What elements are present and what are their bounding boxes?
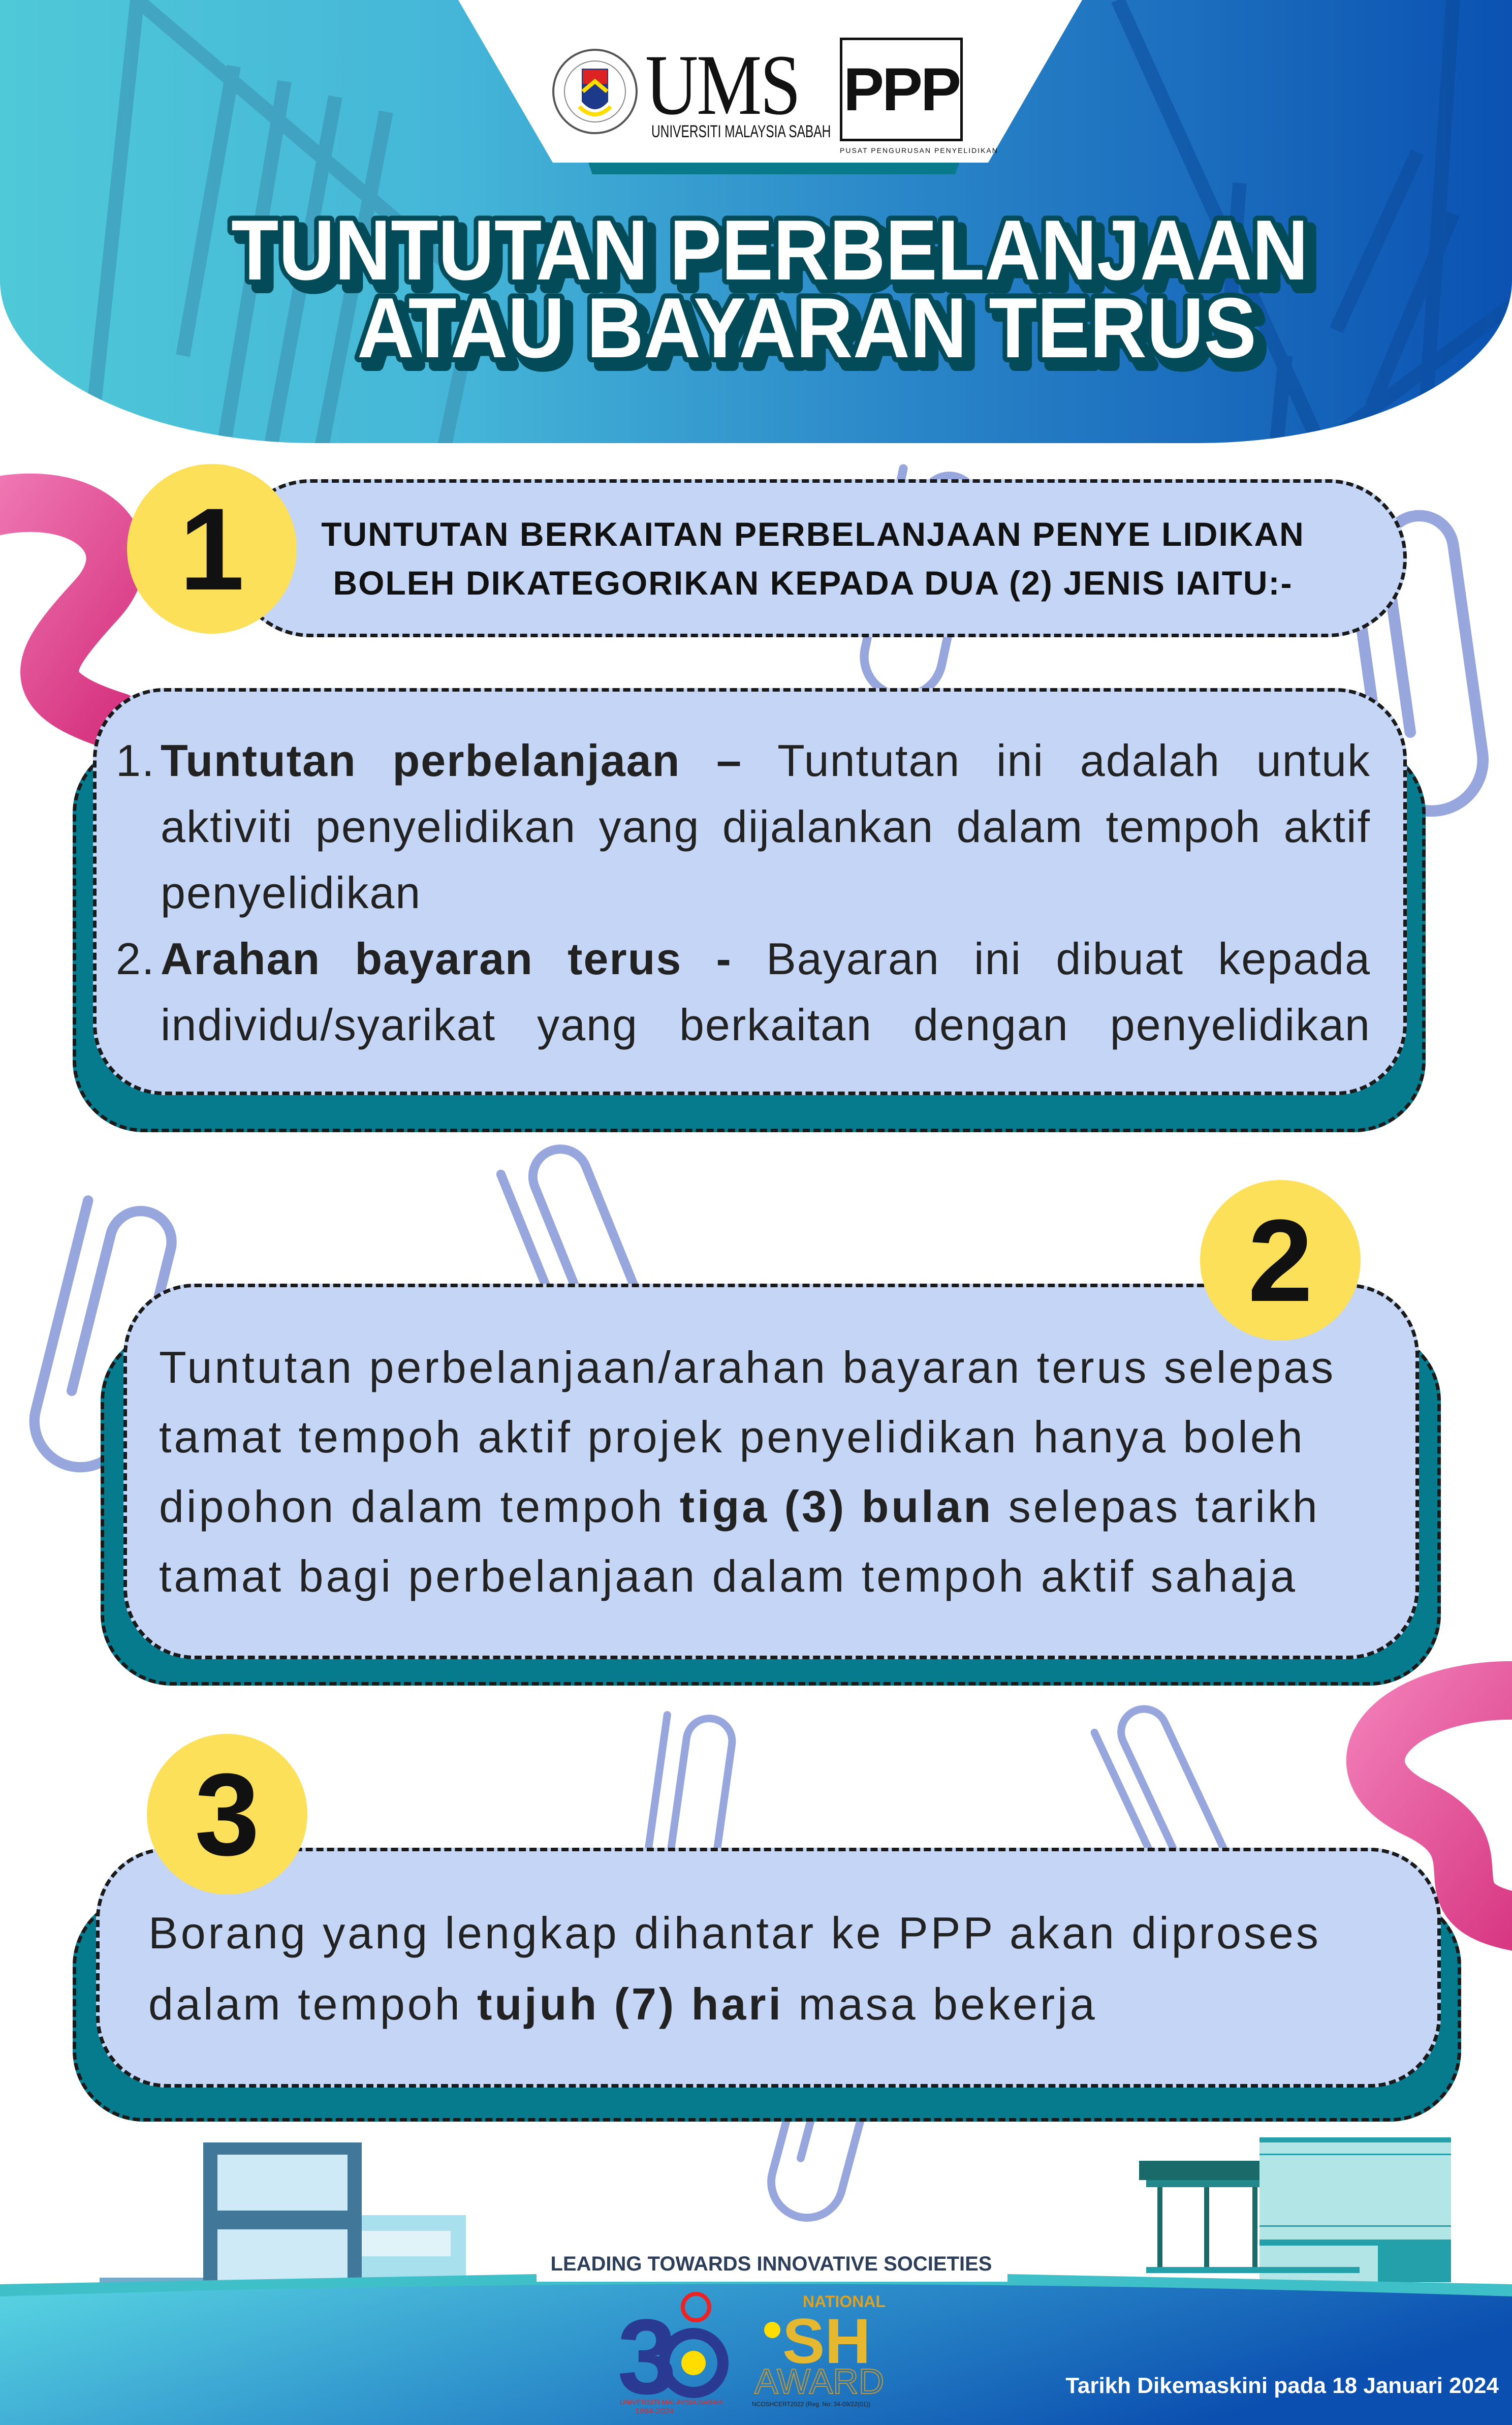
panel 2 text: dipohon dalam tempoh tiga (3) bulan selepas tarikh	[159, 1481, 1320, 1532]
title: ATAU BAYARAN TERUS	[357, 280, 1256, 376]
footer logos: UNIVERSITI MALAYSIA SABAH	[620, 2398, 722, 2406]
panel 3	[73, 1734, 1461, 2122]
panel 1 body: aktiviti penyelidikan yang dijalankan dalam tempoh aktif	[161, 801, 1371, 852]
title: TUNTUTAN PERBELANJAAN	[231, 203, 1308, 298]
panel 2 text: tamat tempoh aktif projek penyelidikan hanya boleh	[159, 1412, 1305, 1462]
panel 2 text	[159, 1342, 1336, 1601]
number 2 badge: 2	[1248, 1195, 1313, 1325]
panel 1 header text: TUNTUTAN BERKAITAN PERBELANJAAN PENYE LIDIKAN	[321, 515, 1305, 553]
panel 1 body: 2.	[116, 934, 155, 984]
footer tagline: LEADING TOWARDS INNOVATIVE SOCIETIES	[551, 2253, 992, 2275]
panel 1 body: Tuntutan perbelanjaan – Tuntutan ini adalah untuk	[161, 735, 1371, 786]
logo tab	[458, 0, 1082, 174]
footer logos: SH	[782, 2306, 871, 2377]
logo: PPP	[840, 38, 998, 154]
panel 1 body: 1.	[116, 735, 155, 786]
panel 1 list text	[116, 735, 1371, 1050]
panel 2	[101, 1180, 1441, 1686]
title	[228, 203, 1316, 383]
panel 1 header text: BOLEH DIKATEGORIKAN KEPADA DUA (2) JENIS IAITU:-	[333, 564, 1293, 602]
panel 1 body: Arahan bayaran terus - Bayaran ini dibuat kepada	[161, 934, 1371, 984]
footer logos: NATIONAL	[803, 2292, 886, 2311]
footer logos	[617, 2292, 886, 2414]
number 1 badge: 1	[179, 484, 244, 614]
footer logos: NCOSHCERT2022 (Reg. No: 34-09/22(01))	[752, 2401, 870, 2408]
footer logos: 3	[617, 2297, 677, 2414]
panel 1 body: individu/syarikat yang berkaitan dengan penyelidikan	[161, 1000, 1371, 1050]
panel 3 text	[148, 1908, 1321, 2029]
number 3 badge	[147, 1734, 307, 1894]
panel 1 header text	[321, 515, 1305, 602]
title: TUNTUTAN PERBELANJAAN	[239, 210, 1316, 305]
logo: UMS: UMS	[645, 37, 799, 133]
panel 1 body: penyelidikan	[161, 867, 421, 918]
logo: UMS: UNIVERSITI MALAYSIA SABAH	[651, 122, 831, 141]
panel 1 header pill	[232, 479, 1407, 637]
title: ATAU BAYARAN TERUS	[365, 288, 1264, 383]
panel 1 header	[127, 464, 1407, 637]
panel 3 text: dalam tempoh tujuh (7) hari masa bekerja	[148, 1979, 1097, 2029]
panel 1 body	[73, 688, 1426, 1132]
panel 2 text: tamat bagi perbelanjaan dalam tempoh aktif sahaja	[159, 1551, 1298, 1601]
footer date: Tarikh Dikemaskini pada 18 Januari 2024	[1065, 2373, 1499, 2398]
title: ATAU BAYARAN TERUS	[357, 280, 1256, 376]
footer buildings	[0, 2137, 1512, 2425]
number 3 badge: 3	[195, 1749, 260, 1879]
logo: PPP: PPP	[843, 55, 959, 123]
logo: PPP: PUSAT PENGURUSAN PENYELIDIKAN	[840, 146, 998, 154]
panel 2 text: Tuntutan perbelanjaan/arahan bayaran terus selepas	[159, 1342, 1336, 1392]
logo: UMS	[552, 37, 831, 141]
footer logos: AWARD	[754, 2361, 884, 2401]
panel 3 text: Borang yang lengkap dihantar ke PPP akan diproses	[148, 1908, 1321, 1958]
number 1 badge	[127, 464, 297, 634]
header background	[0, 0, 1512, 443]
number 2 badge	[1200, 1180, 1361, 1341]
title: TUNTUTAN PERBELANJAAN	[231, 203, 1308, 298]
